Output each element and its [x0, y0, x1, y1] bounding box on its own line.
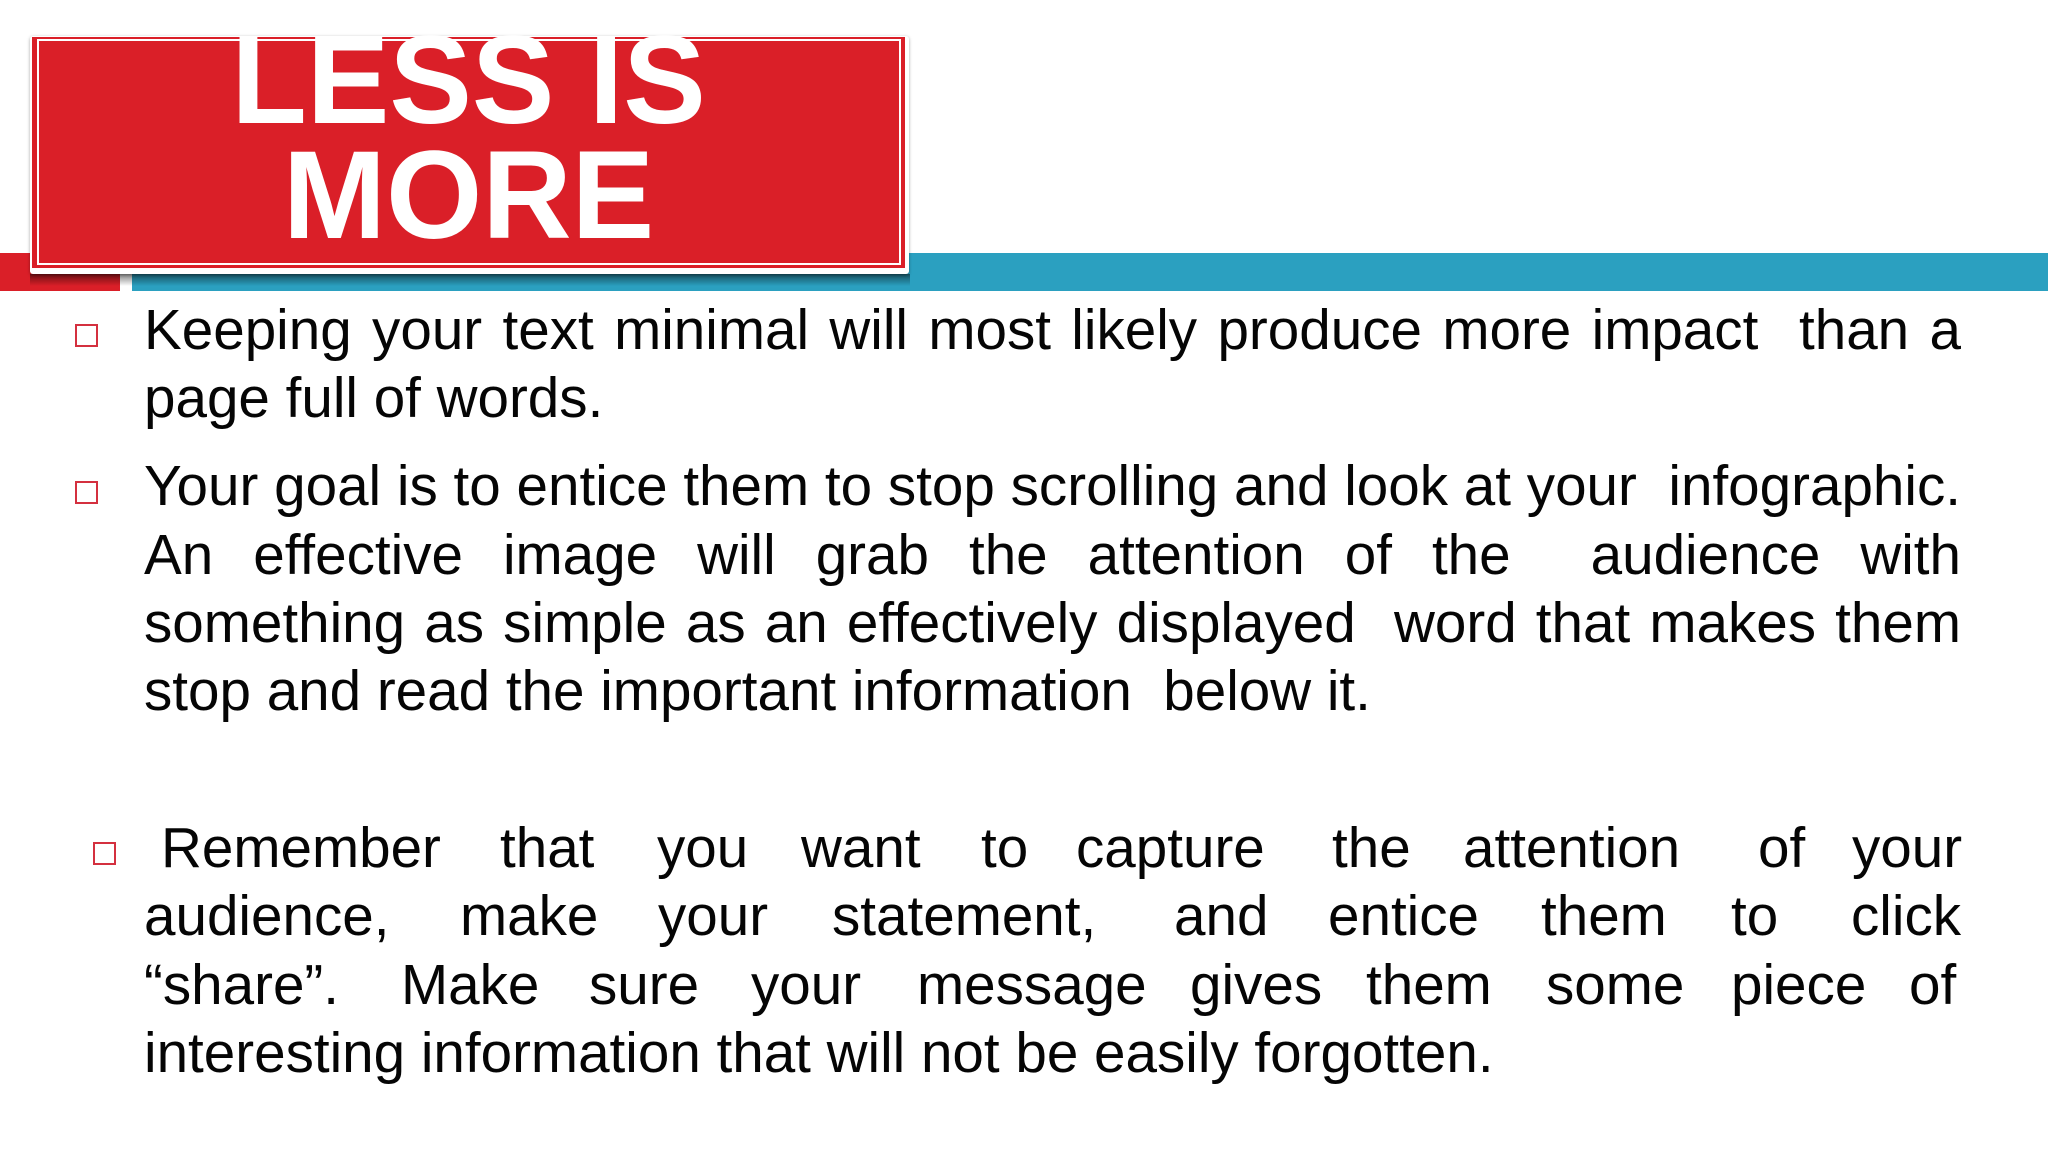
bullet 1 — [75, 324, 98, 347]
paragraph 3: statement, — [832, 884, 1096, 947]
red band segment — [0, 253, 120, 291]
paragraph 3: of — [1909, 953, 1956, 1016]
paragraph 3: your — [751, 953, 861, 1016]
paragraph 3: Make — [401, 953, 539, 1016]
paragraph 3: of — [1758, 816, 1805, 879]
header band — [0, 253, 2048, 291]
paragraph 1: Keeping your text minimal will most likely produce more impact than a — [144, 298, 1961, 361]
bullet 3 — [93, 842, 116, 865]
paragraph 3: “share”. — [144, 953, 339, 1016]
paragraph 3: sure — [589, 953, 699, 1016]
paragraph 1: page full of words. — [144, 366, 603, 429]
title inner border — [36, 39, 900, 265]
paragraph 3: gives — [1190, 953, 1322, 1016]
title — [231, 11, 706, 265]
paragraph 3: you — [657, 816, 748, 879]
paragraph 3: Remember — [161, 816, 441, 879]
title: MORE — [283, 126, 654, 265]
paragraph 3 — [93, 816, 1962, 1084]
title: LESS IS — [231, 11, 706, 150]
paragraph 3: piece — [1731, 953, 1866, 1016]
teal band segment — [132, 253, 2048, 291]
paragraph 3: want — [801, 816, 921, 879]
paragraph 3: click — [1851, 884, 1961, 947]
paragraph 3: them — [1366, 953, 1492, 1016]
bullet 2 — [75, 481, 98, 504]
paragraph 3: make — [460, 884, 598, 947]
title box — [30, 36, 909, 274]
paragraph 3: attention — [1463, 816, 1680, 879]
paragraph 2 — [75, 454, 1961, 722]
paragraph 1 — [75, 298, 1961, 429]
paragraph 3: entice — [1328, 884, 1479, 947]
paragraph 3: audience, — [144, 884, 389, 947]
paragraph 2: stop and read the important information below it. — [144, 659, 1371, 722]
paragraph 3: to — [981, 816, 1028, 879]
paragraph 3: to — [1731, 884, 1778, 947]
paragraph 3: message — [917, 953, 1147, 1016]
paragraph 3: that — [500, 816, 594, 879]
paragraph 2: Your goal is to entice them to stop scrolling and look at your infographic. — [144, 454, 1961, 517]
paragraph 3: capture — [1076, 816, 1265, 879]
paragraph 3: some — [1546, 953, 1684, 1016]
band shadow under title box — [30, 274, 910, 286]
red title panel — [32, 37, 905, 268]
paragraph 3: the — [1332, 816, 1411, 879]
paragraph 3: your — [1852, 816, 1962, 879]
paragraph 2: An effective image will grab the attention of the audience with — [144, 523, 1961, 586]
paragraph 3: them — [1541, 884, 1667, 947]
paragraph 2: something as simple as an effectively displayed word that makes them — [144, 591, 1961, 654]
paragraph 3: and — [1174, 884, 1268, 947]
paragraph 3: your — [658, 884, 768, 947]
paragraph 3: interesting information that will not be easily forgotten. — [144, 1021, 1494, 1084]
